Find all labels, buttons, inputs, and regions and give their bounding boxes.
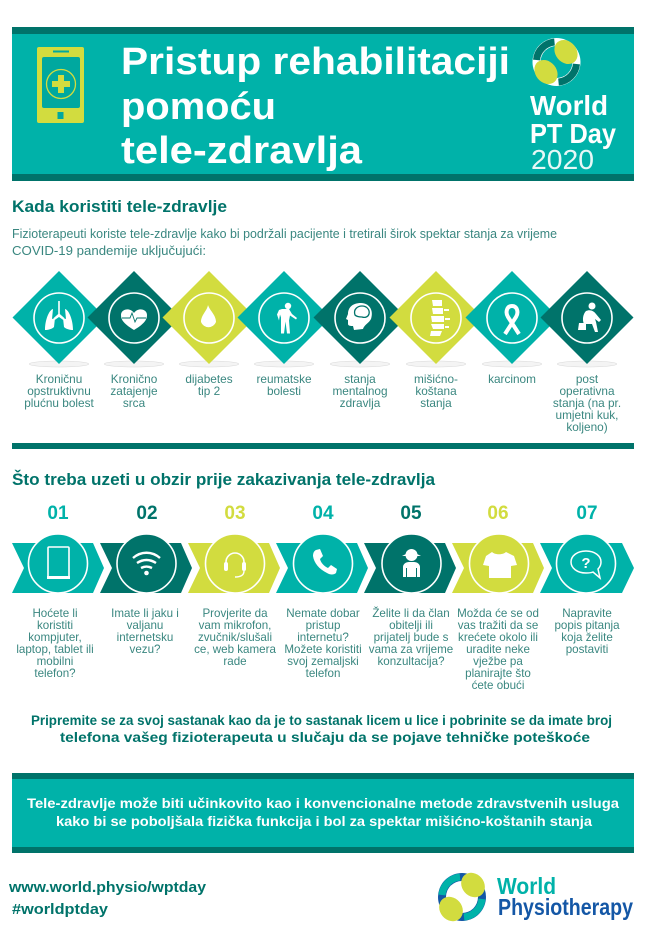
condition: mental health: zdravlja bbox=[340, 396, 381, 410]
step 02: internet: 02 bbox=[136, 503, 158, 524]
logo: World PT Day 2020: 2020 bbox=[531, 144, 594, 175]
step 01: device: 01 bbox=[47, 503, 69, 524]
conclusion banner: Tele-zdravlje može biti učinkovito kao i konvencionalne metode zdravstvenih usluga bbox=[27, 796, 620, 811]
step 04: telephone: Možete koristiti bbox=[284, 643, 362, 656]
condition: COPD: Kroničnu bbox=[36, 372, 82, 386]
conclusion banner bbox=[12, 773, 634, 853]
condition: heart failure bbox=[88, 271, 180, 410]
step 06: clothing bbox=[452, 503, 544, 692]
step 07: questions: ? bbox=[581, 555, 591, 572]
step 07: questions: Napravite bbox=[562, 607, 612, 620]
condition: diabetes: dijabetes bbox=[185, 372, 233, 386]
intro paragraph: COVID-19 pandemije uključujući: bbox=[12, 243, 206, 258]
step 02: internet: internetsku bbox=[117, 631, 173, 644]
step 03: headset: 03 bbox=[224, 503, 246, 524]
condition: rheumatic diseases bbox=[238, 271, 330, 398]
step 01: device: kompjuter, bbox=[28, 631, 82, 644]
step 07: questions bbox=[540, 503, 634, 656]
website link: www.world.physio/wptday bbox=[8, 879, 207, 896]
condition: cancer bbox=[466, 271, 558, 386]
condition: musculoskeletal: koštana bbox=[415, 384, 457, 398]
step 04: telephone: pristup bbox=[306, 619, 340, 632]
condition: rheumatic diseases: reumatske bbox=[256, 372, 312, 386]
condition: mental health: stanja bbox=[344, 372, 376, 386]
step 03: headset: zvučnik/slušali bbox=[198, 631, 272, 644]
title: tele-zdravlja bbox=[121, 130, 363, 172]
step 04: telephone: svoj zemaljski bbox=[287, 655, 359, 668]
step 05: family member: prijatelj bude s bbox=[374, 631, 449, 644]
step 04: telephone bbox=[276, 503, 368, 680]
step 03: headset: vam mikrofon, bbox=[199, 619, 271, 632]
logo: World PT Day 2020: PT Day bbox=[530, 118, 616, 149]
condition: heart failure: srca bbox=[123, 396, 146, 410]
step 06: clothing: krećete okolo ili bbox=[458, 631, 538, 644]
condition: diabetes: tip 2 bbox=[198, 384, 220, 398]
condition: musculoskeletal: stanja bbox=[420, 396, 452, 410]
step 01: device bbox=[12, 503, 104, 680]
icon: smartphone with medical cross bbox=[37, 47, 84, 123]
condition: mental health bbox=[314, 271, 406, 410]
condition: COPD bbox=[12, 271, 106, 410]
steps row bbox=[12, 503, 634, 692]
step 07: questions: popis pitanja bbox=[554, 619, 620, 632]
condition: COPD: plućnu bolest bbox=[24, 396, 94, 410]
step 06: clothing: vježbe pa bbox=[473, 655, 523, 668]
step 01: device: koristiti bbox=[37, 619, 73, 632]
step 06: clothing: 06 bbox=[487, 503, 509, 524]
condition: post-operative: post bbox=[576, 372, 599, 386]
step 05: family member: vama za vrijeme bbox=[369, 643, 453, 656]
step 07: questions: 07 bbox=[576, 503, 598, 524]
step 05: family member bbox=[364, 503, 456, 668]
step 02: internet: Imate li jaku i bbox=[111, 607, 179, 620]
step 05: family member: konzultacija? bbox=[377, 655, 445, 668]
logo: World Physiotherapy bbox=[434, 868, 633, 926]
condition: post-operative bbox=[540, 271, 634, 434]
step 03: headset: Provjerite da bbox=[202, 607, 268, 620]
heading: what to consider: Što treba uzeti u obzir prije zakazivanja tele-zdravlja bbox=[12, 470, 436, 489]
step 06: clothing: Možda će se od bbox=[457, 607, 539, 620]
conclusion banner: kako bi se poboljšala fizička funkcija i bol za spektar mišićno-koštanih stanja bbox=[56, 814, 593, 829]
step 03: headset bbox=[188, 503, 280, 668]
step 04: telephone: internetu? bbox=[297, 631, 349, 644]
step 06: clothing: vas tražiti da se bbox=[458, 619, 538, 632]
heading: when to use: Kada koristiti tele-zdravlje bbox=[12, 197, 227, 216]
step 03: headset: rade bbox=[223, 655, 247, 668]
condition: COPD: opstruktivnu bbox=[27, 384, 91, 398]
step 01: device: Hoćete li bbox=[32, 607, 78, 620]
condition: post-operative: stanja (na pr. bbox=[553, 396, 621, 410]
step 07: questions: postaviti bbox=[566, 643, 608, 656]
step 01: device: laptop, tablet ili bbox=[16, 643, 94, 656]
step 06: clothing: ćete obući bbox=[472, 679, 524, 692]
header banner bbox=[12, 27, 634, 181]
condition: musculoskeletal: mišićno- bbox=[414, 372, 458, 386]
condition: heart failure: Kronično bbox=[111, 372, 158, 386]
logo: World PT Day 2020: World bbox=[530, 90, 608, 121]
title: Pristup rehabilitaciji bbox=[121, 41, 510, 83]
condition: musculoskeletal bbox=[390, 271, 482, 410]
step 05: family member: Želite li da član bbox=[372, 607, 450, 620]
logo: World PT Day 2020 bbox=[530, 35, 616, 175]
step 05: family member: 05 bbox=[400, 503, 422, 524]
step 01: device: mobilni bbox=[37, 655, 73, 668]
condition: diabetes bbox=[162, 271, 256, 398]
conditions row bbox=[12, 271, 634, 434]
condition: cancer: karcinom bbox=[488, 372, 536, 386]
step 07: questions: koja želite bbox=[561, 631, 613, 644]
step 05: family member: obitelji ili bbox=[389, 619, 433, 632]
step 02: internet: vezu? bbox=[130, 643, 161, 656]
step 02: internet: valjanu bbox=[127, 619, 163, 632]
logo: World Physiotherapy: World bbox=[497, 873, 556, 899]
intro paragraph: Fizioterapeuti koriste tele-zdravlje kako bi podržali pacijente i tretirali širok spektar stanja za vrijeme bbox=[12, 226, 557, 241]
condition: rheumatic diseases: bolesti bbox=[267, 384, 301, 398]
step 04: telephone: 04 bbox=[312, 503, 334, 524]
step 03: headset: ce, web kamera bbox=[194, 643, 276, 656]
step 04: telephone: telefon bbox=[306, 667, 340, 680]
hashtag: #worldptday bbox=[12, 901, 109, 918]
condition: heart failure: zatajenje bbox=[110, 384, 158, 398]
step 06: clothing: planirajte što bbox=[465, 667, 531, 680]
step 01: device: telefon? bbox=[34, 667, 76, 680]
step 04: telephone: Nemate dobar bbox=[286, 607, 360, 620]
condition: mental health: mentalnog bbox=[332, 384, 388, 398]
condition: post-operative: umjetni kuk, bbox=[556, 408, 618, 422]
step 06: clothing: uradite neke bbox=[466, 643, 530, 656]
step 02: internet bbox=[100, 503, 192, 656]
title: pomoću bbox=[121, 86, 276, 128]
preparation note: telefona vašeg fizioterapeuta u slučaju da se pojave tehničke poteškoće bbox=[60, 730, 591, 745]
condition: post-operative: operativna bbox=[559, 384, 615, 398]
preparation note: Pripremite se za svoj sastanak kao da je to sastanak licem u lice i pobrinite se da imate broj bbox=[31, 713, 612, 728]
condition: post-operative: koljeno) bbox=[566, 420, 608, 434]
